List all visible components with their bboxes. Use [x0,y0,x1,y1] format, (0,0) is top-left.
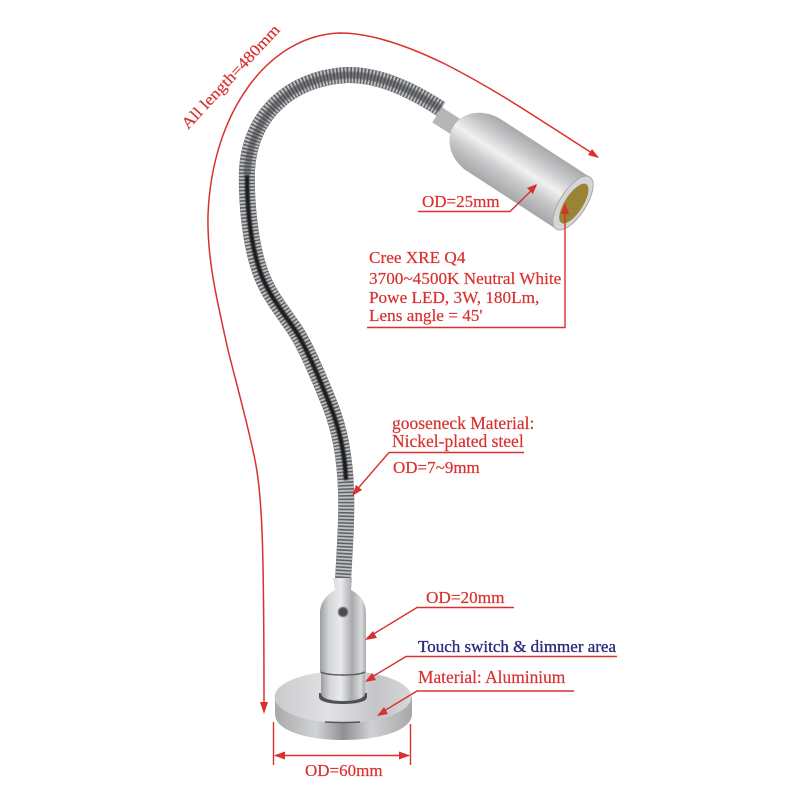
column lower [321,672,365,701]
collar lower [319,693,367,704]
callout: column diameter [365,588,514,640]
callout: material [377,667,574,716]
LED text: Powe LED, 3W, 180Lm, [369,288,539,307]
LED text: Lens angle = 45' [369,306,482,325]
LED text: 3700~4500K Neutral White [369,269,562,288]
base plate groove [325,721,360,724]
label: OD=20mm [426,588,505,607]
LED text: Cree XRE Q4 [369,248,466,267]
label: OD=25mm [422,192,500,211]
leader [379,691,574,714]
collar line [321,672,365,675]
gooseneck [247,75,441,580]
base [274,578,412,740]
dimension: base width [274,722,410,780]
lamp head [420,89,601,236]
head cylinder [437,100,590,229]
label: Touch switch & dimmer area [418,637,616,656]
callout: head diameter [418,184,537,212]
base plate top [274,671,412,723]
material text: gooseneck Material: [392,413,534,433]
head neck [432,107,467,139]
diameter text: OD=7~9mm [393,458,480,477]
length arrow top [588,149,599,158]
label: OD=60mm [305,761,383,780]
leader [367,656,617,680]
length arrow bottom [260,702,268,714]
label: Material: Aluminium [418,667,566,687]
leader [418,186,536,212]
leader [367,205,565,328]
extension lines [274,722,410,765]
callout: touch switch [365,637,617,682]
callout: LED [367,203,569,328]
column highlight [338,607,348,617]
callout: gooseneck [352,413,534,496]
material text: Nickel-plated steel [392,431,524,451]
head front rim [545,170,601,236]
head lens [554,179,594,228]
width line [275,754,409,756]
leader [367,608,514,638]
leader [354,452,524,493]
length curve [208,33,598,708]
dimension: all length [178,21,599,714]
column upper [320,578,366,677]
length label: All length=480mm [178,21,284,133]
base plate side [275,697,412,740]
